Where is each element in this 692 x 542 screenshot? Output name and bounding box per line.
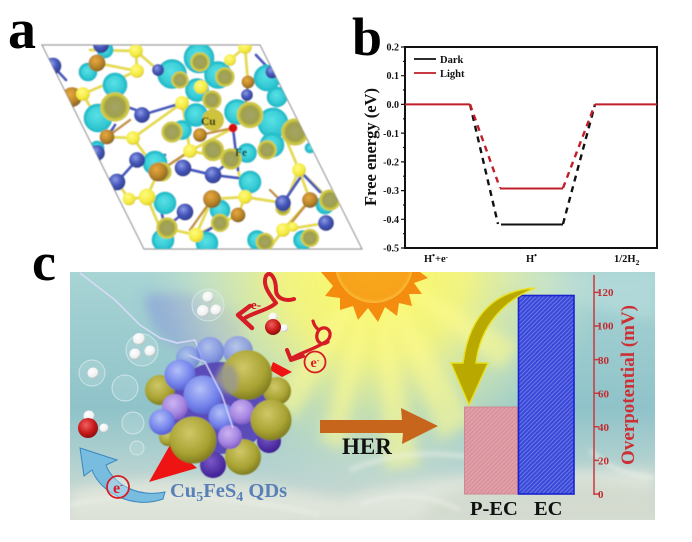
water molecules: [78, 312, 288, 438]
bar labels: [470, 502, 561, 515]
overpotential axis: 40: [598, 422, 610, 434]
y axis numbers: 0.1: [386, 71, 399, 82]
light curve: [405, 104, 657, 188]
y axis numbers: -0.5: [383, 244, 399, 254]
x axis labels: •: [432, 251, 435, 260]
electron badge: right: e: [311, 356, 317, 371]
legend: Dark: [440, 55, 463, 66]
plot frame: [405, 47, 657, 248]
electron label: top: e-: [251, 297, 261, 312]
material label: 5: [196, 490, 203, 505]
label c: c: [32, 232, 56, 292]
blue atoms: [44, 37, 334, 231]
panel c: photo-enhanced HER scene: [70, 272, 655, 520]
label Cu: Cu: [201, 116, 216, 128]
yellow atoms: [76, 40, 306, 242]
material label: Cu: [170, 480, 196, 502]
y axis numbers: [383, 42, 399, 254]
x axis labels: H: [424, 254, 432, 265]
x axis labels: -: [446, 253, 449, 261]
brown atoms: [62, 54, 318, 222]
bar labels: P-EC: [470, 498, 518, 520]
HER arrow: [320, 408, 438, 444]
sun: [321, 272, 428, 322]
panel a: crystal structure: [42, 37, 362, 253]
active site atom: [228, 124, 238, 132]
electron curly arrow: top: [238, 274, 294, 328]
y axis title: Free energy (eV): [361, 88, 380, 206]
lightning: [80, 272, 205, 365]
electron badge: bottom: [107, 476, 129, 498]
y axis numbers: -0.1: [383, 129, 399, 140]
x axis labels: [424, 251, 640, 267]
overpotential axis: 0: [598, 489, 604, 501]
curved olive arrow: [451, 288, 535, 405]
legend: Light: [440, 69, 465, 80]
y axis ticks: [401, 47, 405, 248]
panel b: free energy chart: [361, 42, 657, 267]
x axis labels: +e: [435, 254, 446, 265]
material label: FeS: [203, 480, 236, 502]
material label: QDs: [243, 480, 287, 502]
bar labels: EC: [534, 498, 562, 520]
electron curly arrow: right: [287, 321, 330, 360]
blue splash arrow: [80, 448, 165, 502]
y axis numbers: -0.3: [383, 186, 399, 197]
y axis numbers: -0.2: [383, 158, 399, 168]
x axis labels: •: [534, 251, 537, 260]
sun rays: [284, 291, 518, 473]
legend: [414, 55, 465, 80]
overpotential axis title: Overpotential (mV): [618, 305, 639, 465]
x axis labels: H: [526, 254, 534, 265]
olive isosurfaces: [101, 53, 340, 250]
overpotential axis: 60: [598, 388, 610, 400]
scene background: [70, 265, 655, 520]
overpotential axis: 100: [597, 320, 614, 332]
overpotential axis: 20: [598, 456, 610, 468]
electron badge: bottom: e: [113, 480, 120, 497]
bonds: [53, 47, 330, 249]
y axis numbers: 0.0: [386, 100, 399, 111]
hydrogen bubbles: [79, 289, 224, 455]
cyan isosurfaces: [80, 43, 333, 253]
bar: P-EC: [464, 407, 518, 494]
HER label: HER: [342, 434, 392, 459]
label b: b: [352, 7, 382, 67]
electron badge: bottom: -: [120, 480, 123, 490]
Cu5FeS4 quantum dot cluster: [145, 336, 292, 478]
overpotential axis: 80: [598, 355, 610, 367]
y axis numbers: 0.2: [386, 42, 399, 54]
electron badge: right: -: [317, 356, 320, 365]
x axis labels: 1/2H: [614, 254, 636, 265]
x axis labels: 2: [636, 258, 640, 267]
dark curve: [470, 104, 595, 224]
overpotential axis: [594, 275, 614, 501]
red wedges: [149, 362, 292, 482]
label Fe: Fe: [235, 147, 247, 159]
electron badge: right: [304, 352, 326, 372]
bar: EC: [518, 296, 574, 494]
label a: a: [8, 0, 36, 61]
y axis numbers: -0.4: [383, 215, 399, 226]
overpotential axis: 120: [597, 287, 614, 299]
yellow Cu-side lobe: [202, 109, 224, 131]
material label: 4: [236, 490, 243, 505]
